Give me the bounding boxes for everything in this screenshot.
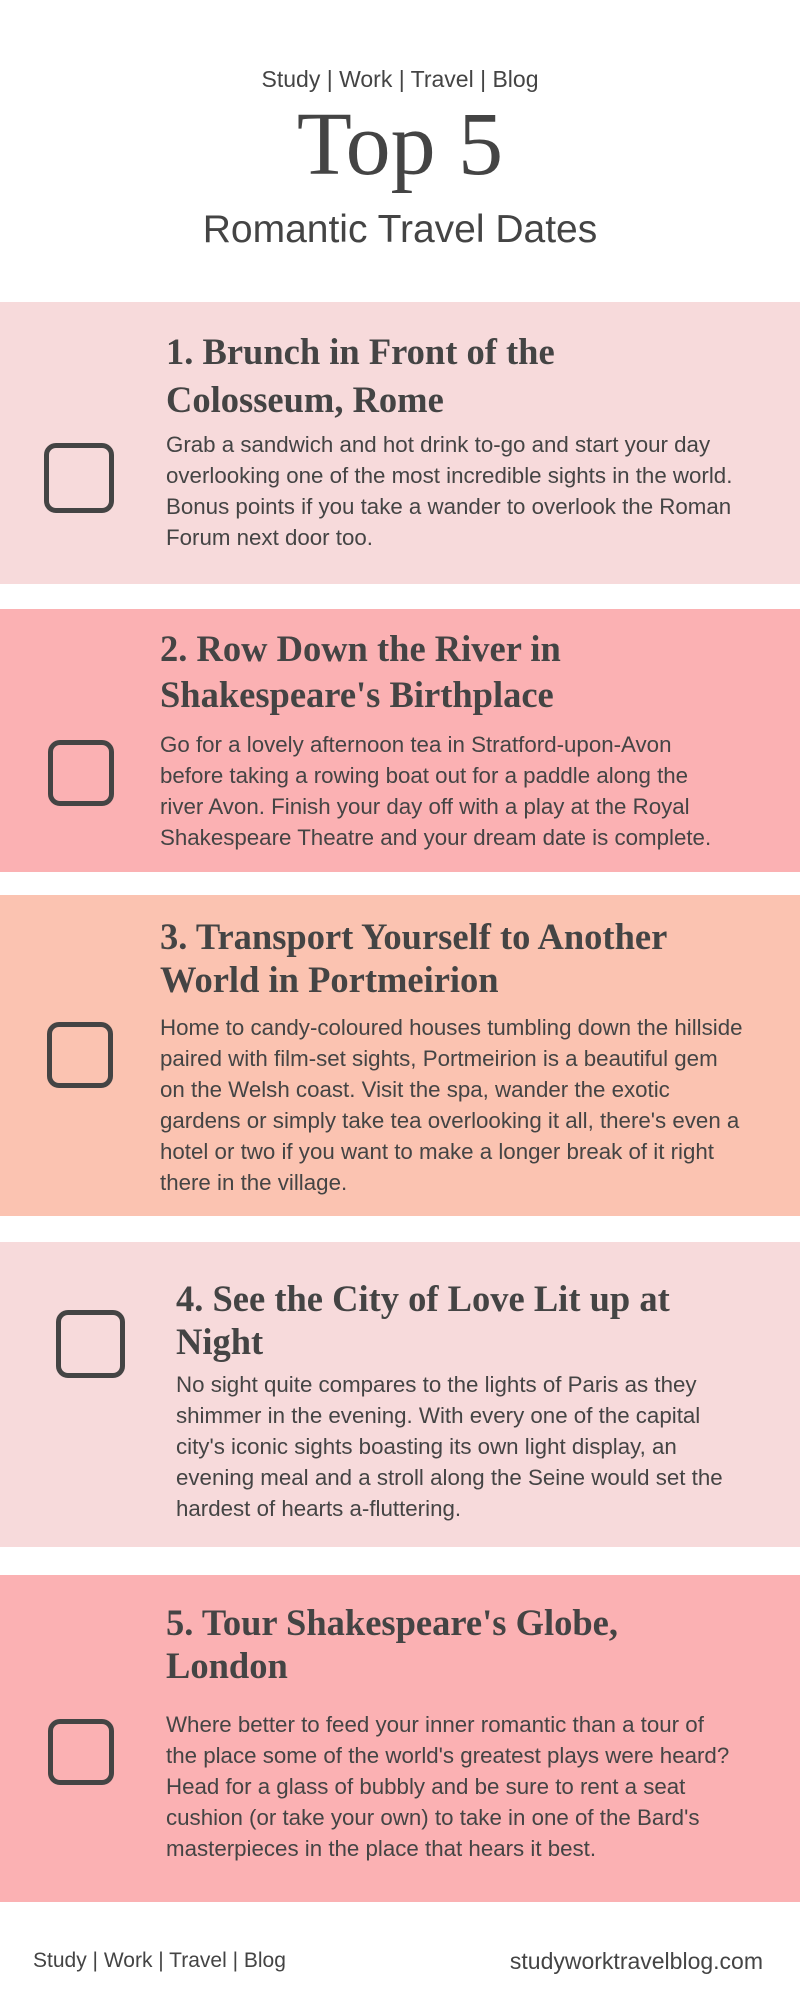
body 2: Go for a lovely afternoon tea in Stratford-upon-Avon <box>160 732 671 757</box>
footer right: studyworktravelblog.com <box>510 1948 763 1974</box>
body 3: gardens or simply take tea overlooking it all, there's even a <box>160 1108 739 1133</box>
heading 1 <box>166 331 555 420</box>
body 1: Bonus points if you take a wander to overlook the Roman <box>166 494 731 519</box>
body 3: Home to candy-coloured houses tumbling down the hillside <box>160 1015 743 1040</box>
heading 4: 4. See the City of Love Lit up at <box>176 1278 670 1319</box>
heading 3: 3. Transport Yourself to Another <box>160 916 667 957</box>
body 4 <box>176 1372 723 1521</box>
body 5: cushion (or take your own) to take in one of the Bard's <box>166 1805 699 1830</box>
panel: 2 Stratford <box>0 609 800 872</box>
body 5: the place some of the world's greatest plays were heard? <box>166 1743 729 1768</box>
icon: checkbox <box>47 1022 113 1088</box>
body 1: overlooking one of the most incredible sights in the world. <box>166 463 732 488</box>
body 3: paired with film-set sights, Portmeirion is a beautiful gem <box>160 1046 718 1071</box>
heading 2: 2. Row Down the River in <box>160 628 561 669</box>
body 2 <box>160 732 711 850</box>
body 4: shimmer in the evening. With every one of the capital <box>176 1403 700 1428</box>
heading 5: London <box>166 1645 288 1686</box>
body 4: hardest of hearts a-fluttering. <box>176 1496 461 1521</box>
heading 2: Shakespeare's Birthplace <box>160 674 554 715</box>
body 5: masterpieces in the place that hears it best. <box>166 1836 596 1861</box>
body 4: evening meal and a stroll along the Seine would set the <box>176 1465 723 1490</box>
body 5 <box>166 1712 729 1861</box>
icon: checkbox <box>44 443 114 513</box>
body 4: city's iconic sights boasting its own light display, an <box>176 1434 677 1459</box>
panel: 5 Globe <box>0 1575 800 1902</box>
body 2: river Avon. Finish your day off with a play at the Royal <box>160 794 690 819</box>
heading 1: Colosseum, Rome <box>166 379 444 420</box>
header tagline: Study | Work | Travel | Blog <box>262 66 538 92</box>
body 1: Grab a sandwich and hot drink to-go and start your day <box>166 432 710 457</box>
body 3: on the Welsh coast. Visit the spa, wander the exotic <box>160 1077 670 1102</box>
subtitle: Romantic Travel Dates <box>203 208 597 251</box>
panel: 4 Paris <box>0 1242 800 1547</box>
icon: checkbox <box>48 1719 114 1785</box>
heading 4: Night <box>176 1321 263 1362</box>
heading 3 <box>160 916 667 1000</box>
body 1 <box>166 432 732 550</box>
body 3: hotel or two if you want to make a longer break of it right <box>160 1139 714 1164</box>
body 3: there in the village. <box>160 1170 347 1195</box>
body 3 <box>160 1015 743 1195</box>
panel: 1 Colosseum <box>0 302 800 584</box>
heading 4 <box>176 1278 670 1362</box>
body 4: No sight quite compares to the lights of Paris as they <box>176 1372 697 1397</box>
icon: checkbox <box>48 740 114 806</box>
heading 3: World in Portmeirion <box>160 959 499 1000</box>
body 1: Forum next door too. <box>166 525 373 550</box>
heading 1: 1. Brunch in Front of the <box>166 331 555 372</box>
heading 5: 5. Tour Shakespeare's Globe, <box>166 1602 618 1643</box>
body 2: before taking a rowing boat out for a paddle along the <box>160 763 688 788</box>
title: Top 5 <box>297 95 503 194</box>
heading 2 <box>160 628 561 715</box>
panel: 3 Portmeirion <box>0 895 800 1216</box>
body 5: Where better to feed your inner romantic than a tour of <box>166 1712 704 1737</box>
body 2: Shakespeare Theatre and your dream date is complete. <box>160 825 711 850</box>
icon: checkbox <box>56 1310 125 1378</box>
body 5: Head for a glass of bubbly and be sure to rent a seat <box>166 1774 685 1799</box>
footer left: Study | Work | Travel | Blog <box>33 1949 286 1972</box>
heading 5 <box>166 1602 618 1686</box>
